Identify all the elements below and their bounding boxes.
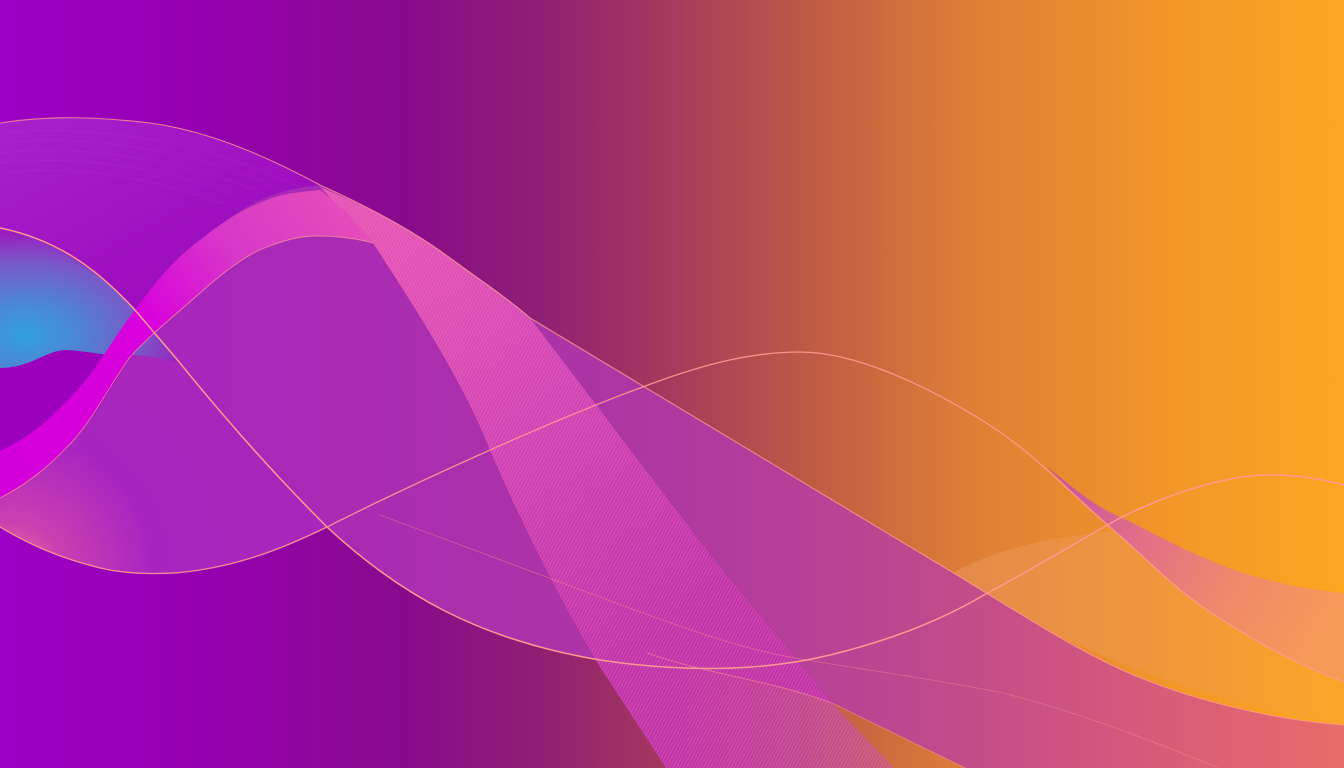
right pink ribbon (1045, 465, 1344, 682)
magenta twisting ribbon (0, 190, 373, 498)
lower band tint (632, 653, 894, 768)
light orange wave area (953, 530, 1344, 725)
blue glow blob (0, 228, 180, 368)
upper ribbon lobe (0, 118, 320, 313)
upper lobe fine lines (0, 131, 305, 212)
left lower lobe (0, 350, 327, 574)
dark purple gap (0, 350, 135, 498)
wide pink mesh band (320, 187, 894, 768)
